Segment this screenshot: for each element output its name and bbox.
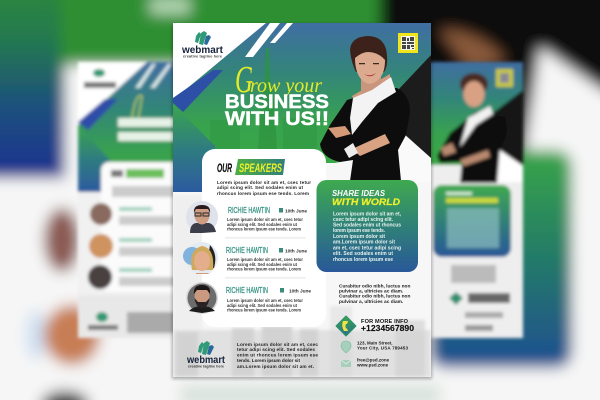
address: 123, Main Street, — [357, 340, 393, 346]
back flyer left — [78, 62, 191, 338]
skyline tower — [210, 48, 317, 160]
title: WITH US!! — [225, 108, 329, 130]
speaker 1: adipi scing elit. Sed sodales enim ut — [227, 222, 298, 227]
icon: location pin — [341, 341, 351, 353]
speaker 1: 10th June — [285, 208, 307, 214]
speaker 2 — [226, 245, 307, 272]
title: G — [235, 59, 253, 101]
footer text: tetur adipi scing elit. Sed sodales — [237, 347, 315, 352]
footer text — [237, 342, 318, 369]
share ideas body text — [333, 212, 402, 263]
title: BUSINESS — [225, 91, 329, 113]
speaker 2: 10th June — [285, 248, 307, 254]
title — [225, 59, 329, 130]
speaker 3: adipi scing elit. Sed sodales enim ut — [227, 303, 298, 308]
flyer paper — [173, 23, 431, 377]
share ideas body text: csec tetur adipi scing elit. — [333, 217, 394, 223]
speaker 2: rhoncus lorem ipsum ese tends. Lorem — [227, 266, 301, 272]
speaker 3: RICHIE HAWTIN — [226, 285, 268, 295]
avatar: blonde woman — [183, 242, 218, 274]
intro text: Lorem ipsum dolor sit am et, csec tetur — [217, 180, 311, 185]
logo: webmart: webmart — [181, 44, 223, 56]
speaker 1 — [227, 205, 307, 232]
footer text: am.Lorem ipsum dolor sit am et. — [237, 364, 314, 369]
share ideas body text: Lorem ipsum dolor sit — [333, 234, 385, 240]
white logo corner — [173, 23, 266, 100]
white triangle — [385, 133, 431, 182]
share ideas body text: am.Lorem ipsum dolor sit — [333, 240, 395, 246]
footer text: Lorem ipsum dolor sit am et, csec — [237, 342, 318, 347]
email — [356, 358, 390, 368]
email: free@psd.zone — [357, 358, 390, 362]
speakers heading: SPEAKERS — [239, 163, 282, 175]
share ideas body text: lorem ipsum ese tends. — [333, 228, 386, 234]
curabitur text: Curabitur odio nibh, luctus non — [339, 294, 410, 300]
title: row your — [250, 75, 322, 97]
intro text: adipi scing elit. Sed sodales enim ut — [217, 185, 303, 190]
speaker 1: RICHIE HAWTIN — [228, 205, 270, 215]
speaker 2: adipi scing elit. Sed sodales enim ut — [227, 262, 298, 267]
speaker 1: rhoncus lorem ipsum ese tends. Lorem — [227, 226, 301, 232]
speaker 2: RICHIE HAWTIN — [226, 245, 268, 255]
curabitur text — [339, 284, 410, 305]
share ideas body text: Lorem ipsum dolor sit am et, — [333, 212, 402, 218]
speakers heading — [217, 159, 285, 175]
avatar: bearded man — [186, 282, 218, 314]
curabitur text: pulvinar a, ultricies ac diam. — [339, 299, 403, 305]
contact phone: FOR MORE INFO — [361, 319, 409, 325]
icon: envelope — [341, 360, 351, 367]
footer logo: webmart: webmart — [186, 354, 225, 366]
panel: share ideas: WITH WORLD — [332, 197, 400, 208]
speaker 3: 10th June — [289, 288, 311, 294]
share ideas body text: am et, csec tetur adipi scing — [333, 246, 401, 252]
share ideas body text: rhoncus lorem ipsum ese — [333, 257, 393, 263]
share ideas body text: Sed sodales enim ut rhoncus — [333, 222, 401, 228]
curabitur text: Curabitur odio nibh, luctus non — [339, 284, 410, 290]
lower left gradient triangle — [173, 104, 215, 192]
speaker 3: rhoncus lorem ipsum ese tends. Lorem — [227, 308, 301, 312]
intro text — [217, 180, 311, 196]
speaker 3: Lorem ipsum dolor sit am et, csec tetur — [227, 298, 303, 303]
speaker portrait: businesswoman — [320, 36, 410, 181]
footer text: tends. Lorem ipsum dolor sit — [237, 358, 300, 363]
speakers heading: OUR — [217, 163, 232, 175]
speaker 2: Lorem ipsum dolor sit am et, csec tetur — [227, 257, 303, 262]
icon: phone diamond — [336, 316, 356, 336]
address — [357, 340, 408, 350]
email: www.psd.zone — [356, 362, 389, 368]
logo: webmart — [181, 31, 223, 58]
speaker 1: Lorem ipsum dolor sit am et, csec tetur — [227, 217, 303, 222]
panel: main flyer — [173, 23, 431, 377]
header gradient background — [173, 23, 431, 165]
panel: share ideas: SHARE IDEAS — [332, 189, 386, 198]
speaker 3 — [226, 285, 311, 312]
address: Your City, USA 789453 — [357, 346, 408, 350]
back flyer right — [425, 62, 523, 338]
footer cityscape — [173, 195, 431, 377]
blue diagonal band — [173, 70, 223, 112]
white diagonal stripes — [245, 23, 293, 57]
footer text: enim ut rhoncus lorem ipsum ese — [237, 352, 318, 358]
black diagonal panel — [398, 55, 431, 166]
share ideas body text: elit. Sed sodales enim ut — [333, 251, 393, 257]
panel: share ideas — [316, 180, 418, 272]
logo: webmart: creative tagline here — [183, 54, 222, 58]
avatar: man with glasses — [186, 201, 218, 233]
footer logo: webmart — [186, 341, 225, 368]
panel: speakers card — [202, 149, 326, 327]
curabitur text: pulvinar a, ultricies ac diam. — [339, 288, 403, 294]
intro text: rhoncus lorem ipsum ese tends. Lorem — [217, 191, 309, 196]
contact phone: +1234567890 — [361, 323, 414, 333]
QR code — [398, 33, 418, 53]
flyer drop shadow — [172, 24, 432, 379]
footer logo: webmart: creative tagline here — [188, 364, 224, 368]
